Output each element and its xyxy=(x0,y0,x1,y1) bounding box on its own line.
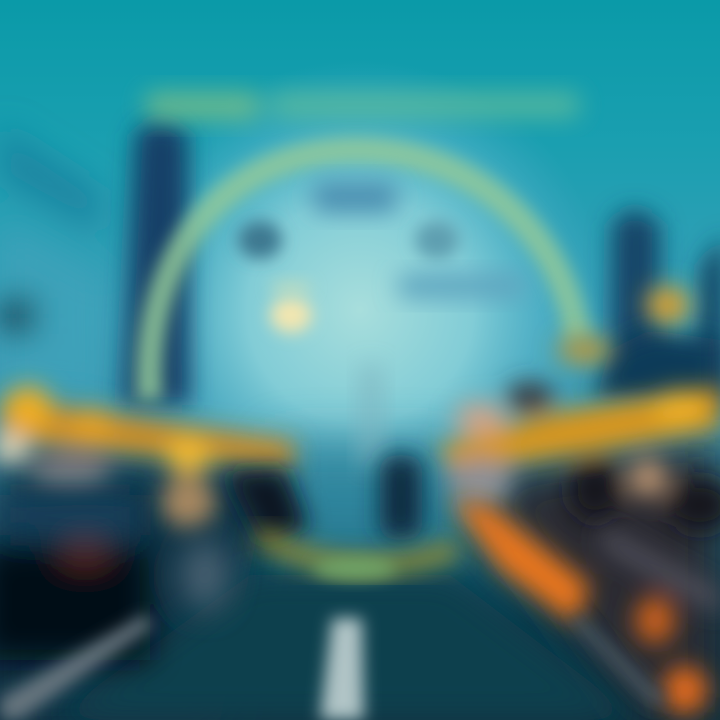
face features xyxy=(238,182,526,465)
silhouette figures xyxy=(225,455,422,548)
left dark mass xyxy=(0,495,229,660)
road right line xyxy=(570,616,665,708)
ring arc xyxy=(149,150,578,400)
right eye xyxy=(415,221,459,259)
tower: left xyxy=(122,120,190,405)
left lower street background xyxy=(0,450,270,720)
top label band xyxy=(312,182,398,212)
left street lights xyxy=(0,386,295,528)
right orange glow xyxy=(450,500,720,714)
buildings: right cluster xyxy=(595,330,720,410)
tower: far right xyxy=(695,235,720,400)
central pole xyxy=(360,365,382,465)
right street lights xyxy=(440,286,720,531)
heading band xyxy=(145,92,580,120)
figure: right xyxy=(380,455,422,540)
tower: right xyxy=(610,210,660,370)
road left line xyxy=(0,614,153,720)
ring bottom arc xyxy=(258,535,458,566)
road centre dash xyxy=(320,618,364,720)
towers xyxy=(122,120,720,410)
left sky haze xyxy=(0,125,110,400)
road xyxy=(50,575,640,720)
central glow xyxy=(110,60,610,560)
yellow spot xyxy=(270,297,312,333)
right label band xyxy=(398,274,526,298)
left eye xyxy=(238,221,282,259)
lower centre shade xyxy=(270,440,460,560)
right lower street background xyxy=(470,440,720,720)
figure: left xyxy=(225,468,308,548)
